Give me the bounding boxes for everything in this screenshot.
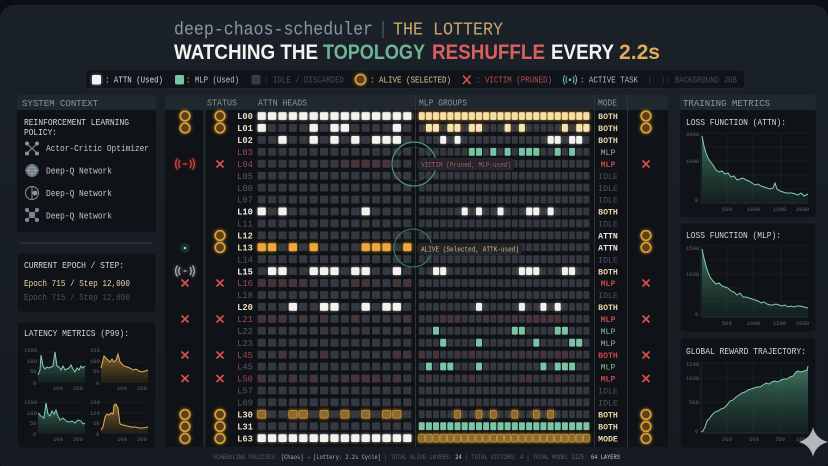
chart: global reward: 200 bbox=[722, 436, 732, 443]
mode column: MLP bbox=[601, 280, 615, 289]
title: headline: WATCHING THE bbox=[174, 40, 318, 64]
row labels: L12 bbox=[237, 232, 253, 242]
row labels: L57 bbox=[237, 387, 253, 397]
chart: latency 1: 1500 bbox=[24, 347, 37, 354]
chart: latency 1: 100 bbox=[53, 385, 63, 392]
chart: latency 1: 100 bbox=[27, 358, 37, 365]
chart: loss mlp: 2000 bbox=[796, 320, 809, 327]
idle cells: attention heads bbox=[258, 112, 414, 446]
chart: loss mlp: 1500 bbox=[686, 245, 699, 252]
mode column: MLP bbox=[601, 340, 615, 349]
chart: loss mlp: 1500 bbox=[773, 320, 786, 327]
chart: global reward: 500 bbox=[749, 436, 759, 443]
title: headline: RESHUFFLE bbox=[432, 40, 545, 64]
column headers: MODE bbox=[598, 98, 617, 108]
heading: latency metrics: LATENCY METRICS (P99): bbox=[24, 328, 129, 339]
row labels: L45 bbox=[237, 363, 253, 373]
panel: system context bbox=[17, 95, 156, 232]
chart: loss attn bbox=[686, 131, 809, 213]
panel: global reward bbox=[680, 338, 816, 448]
chart: latency 4 bbox=[90, 399, 148, 443]
mode column: BOTH bbox=[598, 137, 618, 146]
chart: loss mlp: 0 bbox=[695, 311, 698, 318]
row labels: L11 bbox=[237, 220, 253, 230]
chart: loss attn: 2000 bbox=[686, 131, 699, 138]
mode column: BOTH bbox=[598, 268, 618, 277]
chart: loss mlp: 500 bbox=[722, 320, 732, 327]
chart: latency 2 bbox=[90, 347, 148, 392]
idle cells: mlp groups bbox=[419, 112, 591, 446]
legend: alive bbox=[356, 74, 451, 86]
text: epoch active: Epoch 715 / Step 12,000 bbox=[24, 279, 130, 289]
mode column: BOTH bbox=[598, 352, 618, 361]
row labels: L06 bbox=[237, 184, 253, 194]
mode column: IDLE bbox=[598, 173, 618, 182]
chart: latency 4: 200 bbox=[137, 436, 147, 443]
legend: background job: (··) bbox=[648, 77, 665, 85]
mode column: MLP bbox=[601, 161, 615, 170]
mode column: MLP bbox=[601, 316, 615, 325]
legend: MLP used: : MLP (Used) bbox=[186, 76, 239, 86]
chart: global reward: 0 bbox=[695, 428, 698, 435]
heading: loss attn: LOSS FUNCTION (ATTN): bbox=[686, 117, 786, 128]
row labels: L00 bbox=[237, 112, 253, 122]
text: deep-q network 1: Deep-Q Network bbox=[46, 166, 112, 176]
heading: current epoch: CURRENT EPOCH / STEP: bbox=[24, 260, 124, 271]
legend: active task bbox=[563, 75, 639, 86]
mode column: IDLE bbox=[598, 221, 618, 230]
panel: current epoch bbox=[17, 253, 156, 312]
text: epoch previous: Epoch 715 / Step 12,800 bbox=[24, 293, 130, 303]
legend bar bbox=[86, 70, 744, 88]
row labels: L03 bbox=[237, 148, 253, 158]
chart: latency 4: 50 bbox=[93, 420, 100, 427]
mode column: MLP bbox=[601, 328, 615, 337]
mode column: IDLE bbox=[598, 388, 618, 397]
column headers: STATUS bbox=[207, 98, 237, 108]
mode column: MODE bbox=[598, 435, 618, 444]
text: deep-q network 3: Deep-Q Network bbox=[46, 212, 112, 222]
row labels: L21 bbox=[237, 315, 253, 325]
title: scheduler name: THE LOTTERY bbox=[393, 20, 503, 40]
victim crosses bbox=[182, 160, 650, 382]
chart: latency 2: 150 bbox=[90, 347, 100, 354]
attention cells: active bbox=[258, 124, 411, 442]
icon: sparkle watermark bbox=[799, 427, 828, 457]
chart: latency 3 bbox=[24, 399, 85, 443]
chart: latency 2: 100 bbox=[90, 358, 100, 365]
row labels: L10 bbox=[237, 208, 253, 218]
mode column: BOTH bbox=[598, 125, 618, 134]
legend: alive: : ALIVE (SELECTED) bbox=[370, 76, 451, 86]
title: headline: EVERY bbox=[551, 40, 614, 64]
mode column: IDLE bbox=[598, 185, 618, 194]
chart: loss attn: 1500 bbox=[773, 206, 786, 213]
text: policy heading bbox=[24, 117, 129, 138]
row labels: L50 bbox=[237, 375, 253, 385]
chart: global reward bbox=[686, 361, 809, 443]
row labels: L14 bbox=[237, 255, 253, 265]
chart: latency 3: 100 bbox=[53, 436, 63, 443]
chart: global reward: 500 bbox=[689, 399, 699, 406]
mode column: BOTH bbox=[598, 113, 618, 122]
alive rings bbox=[180, 111, 651, 443]
chart: latency 4: 120 bbox=[90, 410, 100, 417]
legend: active task: : ACTIVE TASK bbox=[580, 76, 639, 86]
chart: loss attn: 2000 bbox=[796, 206, 809, 213]
mode column: IDLE bbox=[598, 256, 618, 265]
row labels: L23 bbox=[237, 339, 253, 349]
mode column: ATTN bbox=[598, 244, 618, 253]
title: scheduler name: deep-chaos-scheduler bbox=[174, 20, 373, 40]
row labels: L01 bbox=[237, 124, 253, 134]
row labels: L20 bbox=[237, 303, 253, 313]
text: policy heading: REINFORCEMENT LEARNING bbox=[24, 117, 129, 128]
row labels: L13 bbox=[237, 243, 253, 253]
row labels: L02 bbox=[237, 136, 253, 146]
mode column: BOTH bbox=[598, 304, 618, 313]
row labels: L69 bbox=[237, 398, 253, 408]
heading: loss mlp: LOSS FUNCTION (MLP): bbox=[686, 230, 781, 241]
legend: MLP used bbox=[175, 75, 239, 86]
title: headline bbox=[174, 40, 660, 64]
panel: training metrics bbox=[680, 95, 816, 448]
row labels: L16 bbox=[237, 279, 253, 289]
icon: green pulse dot bbox=[180, 243, 190, 253]
row L00 full activations bbox=[258, 112, 591, 120]
mode column: BOTH bbox=[598, 412, 618, 420]
heading: global reward: GLOBAL REWARD TRAJECTORY: bbox=[686, 346, 806, 357]
chart: loss mlp: 1000 bbox=[747, 320, 760, 327]
row labels: L31 bbox=[237, 422, 253, 432]
chart: global reward: 1000 bbox=[796, 436, 809, 443]
chart: loss attn: 1000 bbox=[686, 158, 699, 165]
panel: loss mlp bbox=[680, 223, 816, 332]
mode column: MLP bbox=[601, 149, 615, 158]
text: deep-q network 2: Deep-Q Network bbox=[46, 189, 112, 199]
mode column: MLP bbox=[601, 376, 615, 385]
title: scheduler name bbox=[174, 20, 503, 40]
column headers: ATTN HEADS bbox=[258, 98, 307, 108]
legend: victim: : VICTIM (PRUNED) bbox=[476, 76, 552, 86]
legend: idle: : IDLE / DISCARDED bbox=[264, 76, 344, 86]
mode column: IDLE bbox=[598, 400, 618, 408]
chart: loss attn: 500 bbox=[722, 206, 732, 213]
title: headline: 2.2s bbox=[619, 40, 660, 64]
icon: red signal, pruned active task bbox=[176, 158, 194, 170]
mlp cells: active bbox=[419, 124, 589, 442]
callout: alive label bbox=[417, 243, 523, 255]
chart: loss mlp bbox=[686, 245, 809, 327]
row labels: L07 bbox=[237, 196, 253, 206]
chart: latency 2: 200 bbox=[137, 385, 147, 392]
chart: global reward: 1000 bbox=[686, 375, 699, 382]
mode column: IDLE bbox=[598, 197, 618, 206]
mode column: MLP bbox=[601, 364, 615, 373]
legend: background job: : BACKGROUND JOB bbox=[666, 76, 737, 86]
legend: ATTN used bbox=[92, 75, 163, 86]
legend: ATTN used: : ATTN (Used) bbox=[105, 76, 163, 86]
chart: latency 2: 0 bbox=[96, 380, 99, 387]
chart: latency 3: 50 bbox=[30, 420, 37, 427]
chart: latency 3: 0 bbox=[33, 431, 36, 438]
mode column: IDLE bbox=[598, 292, 618, 301]
callout: victim scan ring bbox=[392, 142, 436, 186]
chart: latency 1: 50 bbox=[30, 368, 37, 375]
panel: loss attn bbox=[680, 110, 816, 217]
mode column: ATTN bbox=[598, 232, 618, 242]
mode column: BOTH bbox=[598, 209, 618, 218]
chart: latency 1 bbox=[24, 347, 85, 392]
chart: latency 3: 200 bbox=[73, 436, 83, 443]
row labels: L45 bbox=[237, 351, 253, 361]
title: headline: TOPOLOGY bbox=[323, 40, 425, 64]
row labels: L63 bbox=[237, 434, 253, 444]
callout: alive scan ring bbox=[394, 229, 432, 267]
icon: brain circuit bbox=[26, 186, 38, 200]
text: actor-critic optimizer: Actor-Critic Optimizer bbox=[46, 144, 149, 154]
row labels: L15 bbox=[237, 267, 253, 277]
callout: alive label: ALIVE (Selected, ATTK-used) bbox=[421, 246, 519, 254]
row labels: L05 bbox=[237, 172, 253, 182]
icon: actor-critic network bbox=[26, 142, 38, 155]
chart: latency 2: 50 bbox=[93, 368, 100, 375]
chart: global reward: 750 bbox=[775, 436, 785, 443]
chart: latency 2: 100 bbox=[117, 385, 127, 392]
chart: loss attn: 0 bbox=[695, 197, 698, 204]
chart: latency 1: 0 bbox=[33, 380, 36, 387]
chart: latency 4: 0 bbox=[96, 431, 99, 438]
chart: latency 1: 200 bbox=[73, 385, 83, 392]
chart: latency 4: 150 bbox=[90, 399, 100, 406]
chart: loss attn: 1000 bbox=[747, 206, 760, 213]
row labels: L22 bbox=[237, 327, 253, 337]
column headers bbox=[207, 98, 617, 108]
footer status line: SCHEDULING POLICIES: [Chaos] → [Lottery: 2.2s Cycle] | TOTAL ALIVE LAYERS: 24 | TOTAL VICTIMS: 4 | TOTAL MODEL SIZE: 64 LAYERS bbox=[213, 454, 620, 461]
heading: system context: SYSTEM CONTEXT bbox=[22, 98, 98, 109]
callout: victim label bbox=[417, 158, 515, 170]
callout: victim label: VICTIM (Pruned, MLP-used) bbox=[421, 162, 511, 170]
icon: mesh sphere bbox=[25, 164, 39, 177]
legend: background job bbox=[648, 76, 737, 86]
chart: latency 3: 1500 bbox=[24, 399, 37, 406]
row labels: L04 bbox=[237, 160, 253, 170]
mode column bbox=[598, 113, 618, 444]
chart: loss mlp: 1000 bbox=[686, 271, 699, 278]
row labels: L30 bbox=[237, 410, 253, 420]
icon: white signal, active task bbox=[176, 266, 194, 276]
row labels bbox=[237, 112, 253, 444]
chart: latency 4: 100 bbox=[117, 436, 127, 443]
panel: scheduler grid bbox=[165, 95, 668, 447]
column headers: MLP GROUPS bbox=[419, 98, 467, 108]
mode column: BOTH bbox=[598, 423, 618, 432]
chart: latency 3: 100 bbox=[27, 410, 37, 417]
panel: latency metrics bbox=[17, 322, 156, 448]
row labels: L18 bbox=[237, 291, 253, 301]
chart: global reward: 1200 bbox=[686, 361, 699, 368]
icon: node cluster bbox=[25, 208, 39, 222]
heading: training metrics: TRAINING METRICS bbox=[683, 98, 770, 109]
text: policy heading: POLICY: bbox=[24, 127, 57, 138]
